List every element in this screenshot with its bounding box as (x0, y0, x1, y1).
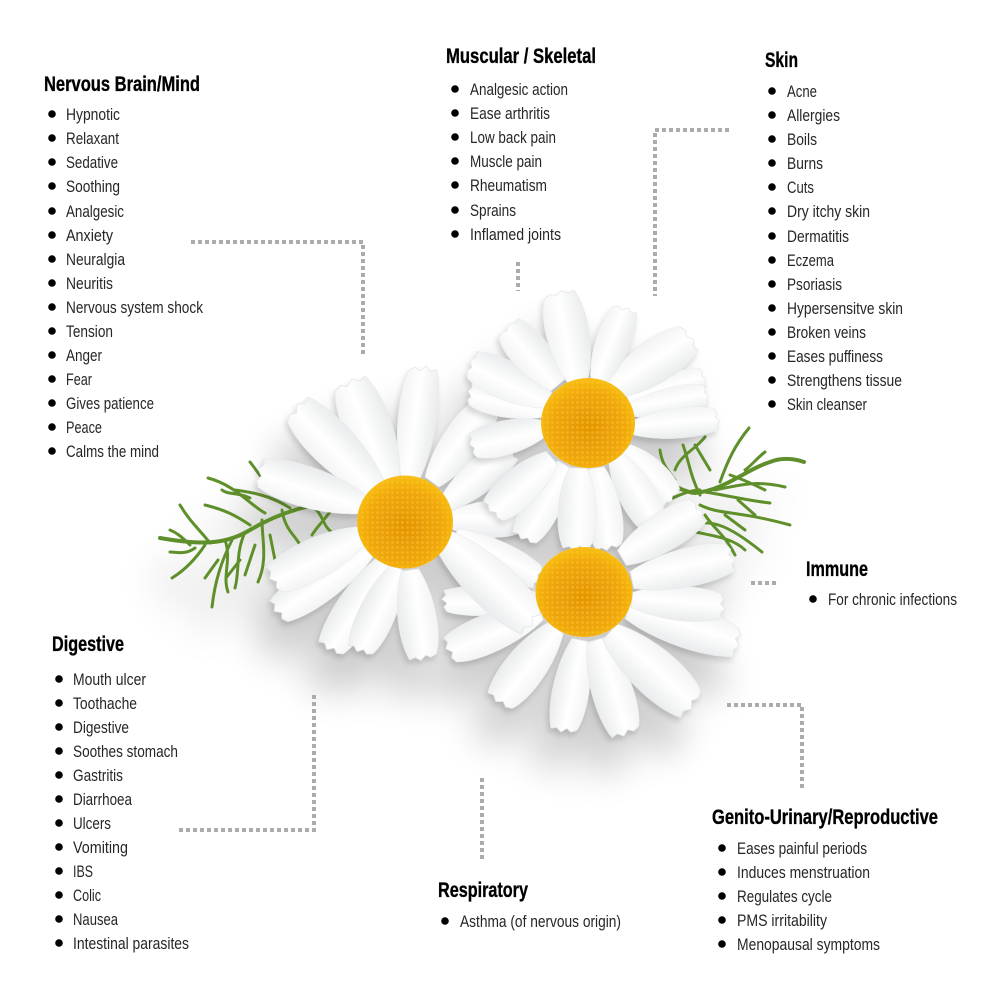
list (718, 840, 880, 954)
list: Regulates cycle (737, 888, 832, 906)
connector: nervous (191, 242, 363, 355)
list: Menopausal symptoms (737, 936, 880, 954)
heading: Digestive (52, 633, 124, 656)
list: Toothache (73, 695, 137, 713)
list (451, 81, 568, 244)
list: Fear (66, 371, 92, 389)
panel: skin (765, 49, 903, 414)
list: Neuritis (66, 275, 113, 293)
list: Cuts (787, 179, 814, 197)
flower C centre (536, 547, 632, 637)
list: Peace (66, 419, 102, 437)
list: Hypnotic (66, 106, 120, 124)
panel: nervous brain/mind (44, 73, 204, 461)
list: Gastritis (73, 767, 123, 785)
list: Diarrhoea (73, 791, 133, 809)
panel: respiratory (438, 879, 621, 931)
list: Dermatitis (787, 228, 849, 246)
list (55, 671, 189, 953)
list: Allergies (787, 107, 840, 125)
list: Ease arthritis (470, 105, 550, 123)
heading: Skin (765, 49, 798, 72)
list (48, 106, 204, 461)
list: Induces menstruation (737, 864, 870, 882)
list: Intestinal parasites (73, 935, 189, 953)
list: Gives patience (66, 395, 154, 413)
list: Psoriasis (787, 276, 842, 294)
heading: Muscular / Skeletal (446, 45, 596, 68)
connector: genito-urinary (727, 705, 802, 788)
list: Rheumatism (470, 177, 547, 195)
list: Sprains (470, 202, 516, 220)
right leaf sprig (625, 428, 804, 560)
heading: Nervous Brain/Mind (44, 73, 200, 96)
list: IBS (73, 863, 93, 881)
flower B petals (461, 287, 721, 553)
connector: skin (655, 130, 729, 296)
connector: digestive (179, 694, 314, 830)
list: Anger (66, 347, 102, 365)
flower A centre (357, 476, 453, 568)
panel: genito-urinary / reproductive (712, 806, 938, 954)
heading: Immune (806, 558, 868, 581)
panel: immune (806, 558, 957, 609)
list (768, 83, 903, 414)
list: Digestive (73, 719, 129, 737)
connector: muscular (516, 262, 520, 291)
list: For chronic infections (828, 591, 957, 609)
list: Analgesic (66, 203, 124, 221)
list: Hypersensitve skin (787, 300, 903, 318)
list: Dry itchy skin (787, 203, 870, 221)
list: Eczema (787, 252, 835, 270)
list: Muscle pain (470, 153, 542, 171)
list: Nausea (73, 911, 119, 929)
list: Soothes stomach (73, 743, 178, 761)
list: Nervous system shock (66, 299, 204, 317)
panel: muscular / skeletal (446, 45, 596, 244)
list: Low back pain (470, 129, 556, 147)
list: Colic (73, 887, 101, 905)
connector: respiratory (480, 778, 484, 859)
list: Vomiting (73, 839, 128, 857)
list: Calms the mind (66, 443, 159, 461)
list: Ulcers (73, 815, 111, 833)
list: Inflamed joints (470, 226, 561, 244)
list: Eases painful periods (737, 840, 867, 858)
list: Boils (787, 131, 817, 149)
flower A back petals (251, 363, 548, 663)
list: Strengthens tissue (787, 372, 902, 390)
list: Neuralgia (66, 251, 126, 269)
list: Relaxant (66, 130, 119, 148)
list: Analgesic action (470, 81, 568, 99)
illustration: chamomile flowers (160, 287, 804, 741)
list: Burns (787, 155, 823, 173)
list: Mouth ulcer (73, 671, 146, 689)
list: Broken veins (787, 324, 866, 342)
heading: Genito-Urinary/Reproductive (712, 806, 938, 829)
left leaf sprig (160, 462, 352, 607)
list: Eases puffiness (787, 348, 883, 366)
list: Anxiety (66, 227, 114, 245)
panel: digestive (52, 633, 189, 953)
flower B centre (541, 378, 635, 468)
list: Asthma (of nervous origin) (460, 913, 621, 931)
list: PMS irritability (737, 912, 828, 930)
list: Tension (66, 323, 113, 341)
list: Soothing (66, 178, 120, 196)
list: Skin cleanser (787, 396, 867, 414)
connector: immune (751, 581, 778, 585)
list: Acne (787, 83, 817, 101)
list: Sedative (66, 154, 118, 172)
heading: Respiratory (438, 879, 528, 902)
flower C petals (426, 493, 746, 741)
